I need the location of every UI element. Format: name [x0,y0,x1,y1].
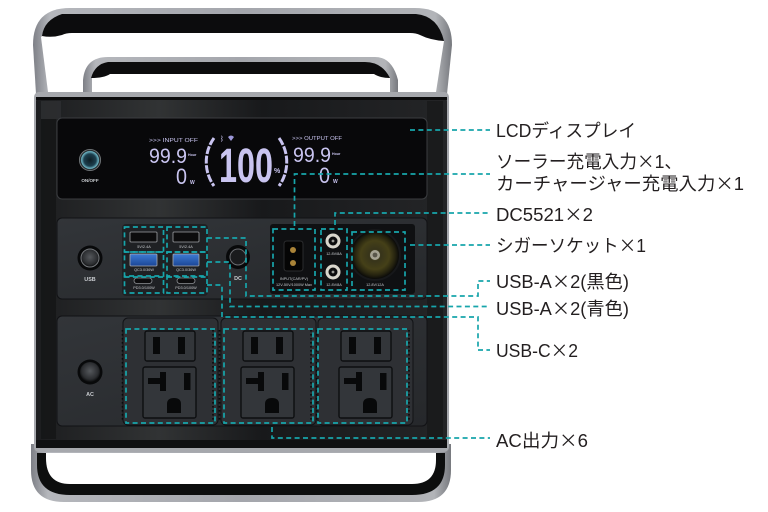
battery percentage gauge: 100 [219,140,273,193]
label: DC5521: DC5521×2 [496,201,593,227]
input readout: 99.9 [149,145,187,168]
solar input connector: 12V-50V/1000W Max [276,283,312,287]
leader line: USB-A blue [207,262,490,306]
bottom frame [31,444,451,502]
DC5521 jacks [326,234,342,287]
solar input connector [276,241,312,287]
input readout: 0 [176,164,187,189]
output readout: 99.9 [293,144,331,167]
AC outlet set 1 [143,331,196,418]
label: solar and car charger input: ソーラー充電入力×1、 [496,148,682,174]
leader line: solar and car input [294,174,490,226]
on/off button: ON/OFF [81,178,99,183]
label: cigar socket: シガーソケット×1 [496,232,646,258]
output readout: Hour [332,152,341,156]
AC panel [57,316,427,426]
label: USB-A blue: USB-A×2(青色) [496,295,629,321]
black DC inputs panel [270,224,415,294]
battery percentage gauge [206,135,287,193]
label: LCD display: LCDディスプレイ [496,121,636,141]
USB-A black ports: 5V/2.4A [179,245,193,249]
solar input connector: INPUT(CAR/PV) [280,277,309,281]
DC switch [226,245,250,282]
top carry handle [33,8,452,94]
DC port panel [57,218,427,299]
label: USB-A black: USB-A×2(黒色) [496,268,629,294]
USB-A blue ports [130,254,199,272]
DC switch: DC [234,276,242,282]
battery percentage gauge: ᛒ [220,135,224,143]
AC switch: AC [86,392,94,398]
USB-C ports: PD3.0/100W [175,286,197,290]
input readout: >>> INPUT OFF [149,138,199,144]
USB switch: USB [84,277,96,283]
DC5521 jacks: 12.8V/8A [326,252,342,256]
USB-A blue ports: QC3.0/36W [134,268,154,272]
LCD panel [57,118,427,199]
USB-A black ports: 5V/2.4A [137,245,151,249]
input readout [149,138,199,189]
battery percentage gauge: % [274,168,281,175]
device body [34,92,449,452]
leader line: USB-A black [207,238,490,296]
on/off button [79,149,101,183]
leader line: AC output [272,427,490,438]
USB-A blue ports: QC3.0/36W [176,268,196,272]
USB switch [78,246,102,283]
output readout: 0 [319,163,330,188]
label: USB-C: USB-C×2 [496,337,578,363]
leader line: LCD [410,129,490,131]
USB-A black ports [130,232,199,249]
dashed callout boxes [124,227,407,423]
output readout: W [333,179,338,185]
cigar socket [349,229,401,287]
leader line: cigar socket [410,244,490,246]
label: solar and car charger input [496,148,744,196]
output readout [292,136,343,188]
USB-C ports [133,278,197,290]
input readout: Hour [188,153,197,157]
DC5521 jacks: 12.8V/8A [326,283,342,287]
output readout: >>> OUTPUT OFF [292,136,343,142]
AC outlet set 3 [339,331,392,418]
USB-C ports: PD3.0/100W [133,286,155,290]
cigar socket: 12.8V/12A [366,283,384,287]
USB ports group [122,224,208,296]
leader line: USB-C [207,285,490,350]
label: solar and car charger input: カーチャージャー充電入力 ×1 [496,170,744,196]
label: AC output: AC出力×6 [496,427,588,453]
input readout: W [190,180,195,186]
AC switch [78,360,102,398]
AC outlet set 2 [241,331,294,418]
leader line: DC5521 [335,213,490,225]
